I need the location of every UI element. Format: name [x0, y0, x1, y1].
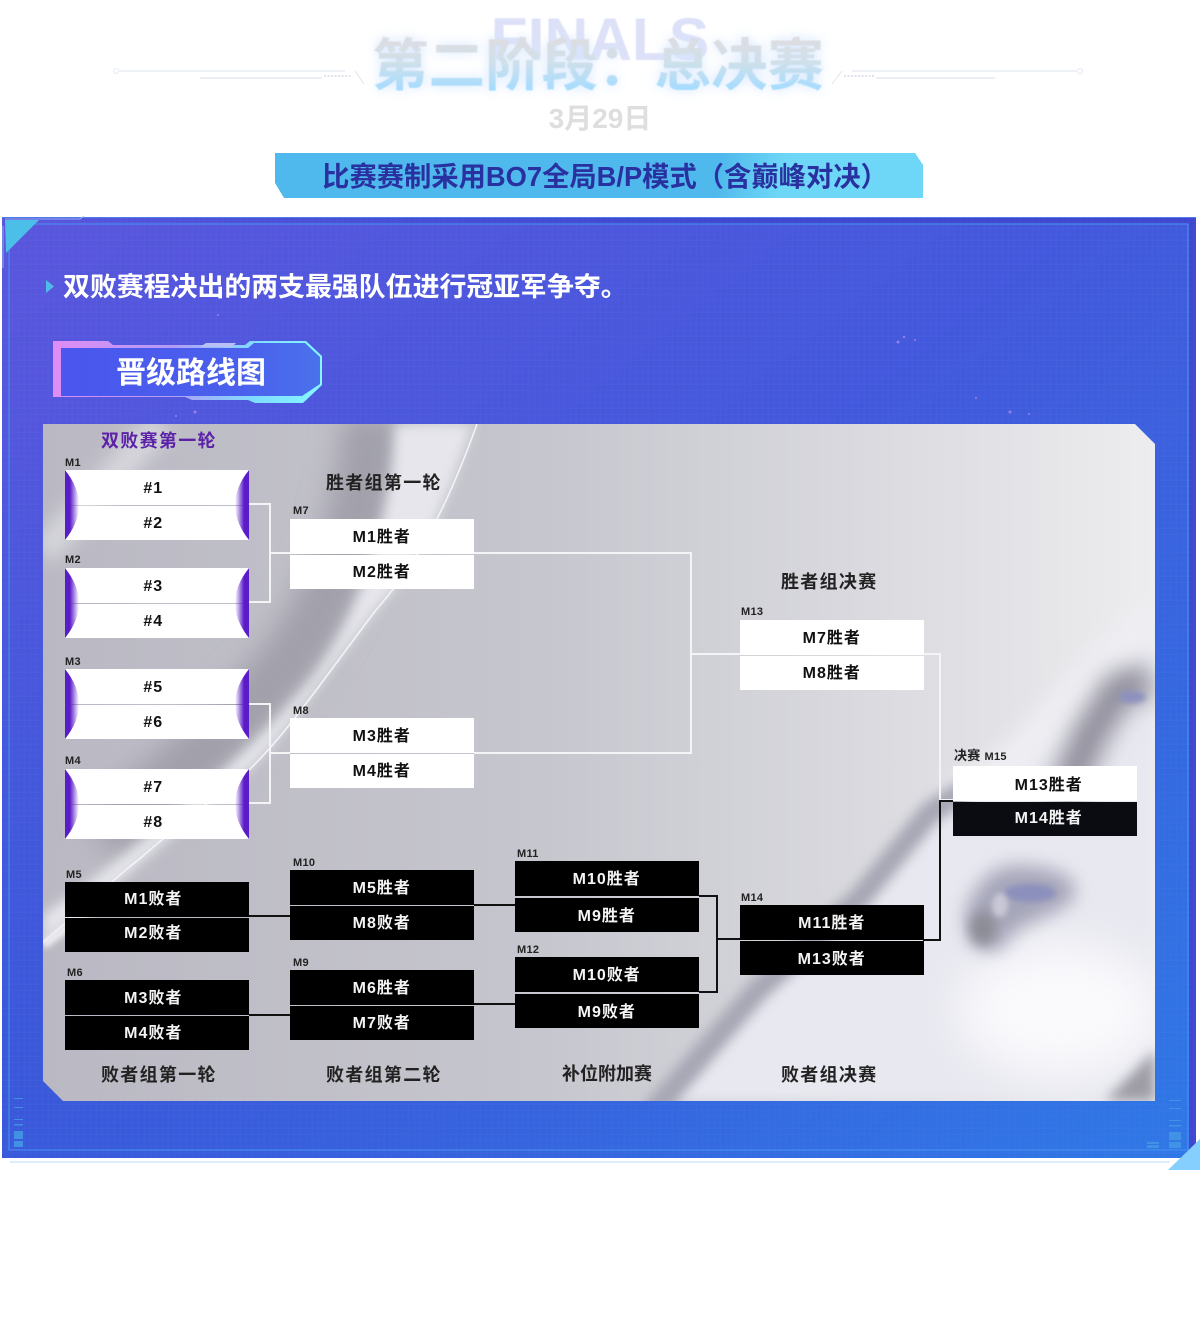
match M2: #4 [143, 612, 163, 630]
round heading: double elimination round one: 双败赛第一轮 [101, 431, 217, 451]
match M4 [65, 769, 249, 839]
match M4: #8 [143, 814, 163, 830]
match label M11: M11 [517, 848, 539, 860]
match M12 [515, 957, 699, 1028]
bracket panel [43, 424, 1155, 1101]
match M7: M2胜者 [353, 564, 411, 580]
match M7 [290, 519, 474, 589]
match M8: M4胜者 [353, 762, 411, 780]
match M1: #2 [143, 514, 163, 532]
match label M15: 决赛 M15 [954, 748, 1007, 763]
match label M14: M14 [741, 892, 763, 904]
heading plate [53, 341, 322, 403]
match M8 [290, 718, 474, 788]
date: 3月29日 [549, 103, 651, 134]
watermark: FINALS: FINALS [491, 5, 709, 73]
match M11 [515, 861, 699, 932]
winner connectors [249, 504, 953, 803]
match M9: M6胜者 [353, 980, 411, 997]
match M15 grand final: M13胜者 [1015, 777, 1083, 794]
match M2 [65, 568, 249, 638]
round heading: losers round one: 败者组第一轮 [101, 1065, 217, 1085]
match M6 [65, 980, 249, 1050]
statement text: 双败赛程决出的两支最强队伍进行冠亚军争夺。 [63, 272, 628, 302]
match M1: #1 [143, 480, 163, 497]
match label M7: M7 [293, 505, 309, 517]
match M13: M7胜者 [803, 630, 861, 647]
match M3: #5 [143, 679, 163, 696]
loser connectors [249, 801, 953, 1015]
match M10: M8败者 [353, 914, 411, 932]
section heading: promotion route [53, 341, 322, 403]
match label M9: M9 [293, 957, 309, 969]
match M12: M9败者 [578, 1004, 636, 1020]
round heading: winners round one: 胜者组第一轮 [326, 473, 442, 493]
match M10 [290, 870, 474, 940]
format banner [275, 153, 923, 198]
match label M4: M4 [65, 755, 81, 767]
match M1 [65, 470, 249, 540]
match M12: M10败者 [573, 967, 641, 984]
panel artwork [43, 424, 1155, 1101]
match M7: M1胜者 [353, 529, 411, 546]
left sweep [100, 415, 372, 835]
match M5: M2败者 [124, 924, 182, 942]
match M10: M5胜者 [353, 880, 411, 897]
match M6: M4败者 [124, 1024, 182, 1042]
match M11: M9胜者 [578, 908, 636, 924]
round heading: losers round two: 败者组第二轮 [326, 1065, 442, 1085]
match M14 [740, 905, 924, 975]
bullet statement [46, 272, 628, 302]
round heading: losers final: 败者组决赛 [781, 1065, 878, 1085]
title: 第二阶段：总决赛 [372, 34, 824, 97]
match M6: M3败者 [124, 990, 182, 1007]
round heading: play-in: 补位附加赛 [562, 1064, 652, 1084]
match label M6: M6 [67, 967, 83, 979]
match M13: M8胜者 [803, 664, 861, 682]
lower right blob [960, 945, 1160, 1075]
match M4: #7 [143, 779, 163, 796]
match M3 [65, 669, 249, 739]
header ornament: right [832, 68, 1083, 84]
match label M10: M10 [293, 857, 315, 869]
banner text: 比赛赛制采用BO7全局B/P模式（含巅峰对决） [322, 161, 888, 192]
match M15 grand final: M14胜者 [1015, 810, 1083, 826]
match label M8: M8 [293, 705, 309, 717]
match M13 [740, 620, 924, 690]
match label M3: M3 [65, 656, 81, 668]
match M14: M11胜者 [798, 915, 865, 932]
match M9 [290, 970, 474, 1040]
corner accent: top left [5, 220, 39, 253]
match M8: M3胜者 [353, 728, 411, 745]
match M2: #3 [143, 578, 163, 595]
match label M1: M1 [65, 457, 81, 469]
match M5 [65, 882, 249, 952]
match M15 grand final [953, 766, 1137, 836]
match label M5: M5 [66, 869, 82, 881]
match M14: M13败者 [798, 950, 866, 968]
match M5: M1败者 [124, 891, 182, 908]
section header [113, 5, 1083, 134]
match M3: #6 [143, 714, 163, 730]
main panel background [2, 216, 1196, 1163]
match label M13: M13 [741, 606, 763, 618]
match label M12: M12 [517, 944, 539, 956]
match M11: M10胜者 [573, 871, 641, 888]
heading text: 晋级路线图 [116, 357, 266, 390]
round heading: winners final: 胜者组决赛 [781, 572, 878, 592]
corner accent: bottom right [1168, 1139, 1200, 1170]
match M9: M7败者 [353, 1014, 411, 1032]
right sweep [680, 801, 1026, 1101]
header ornament: left [113, 68, 364, 84]
match label M2: M2 [65, 554, 81, 566]
icon: bullet triangle [46, 280, 54, 293]
